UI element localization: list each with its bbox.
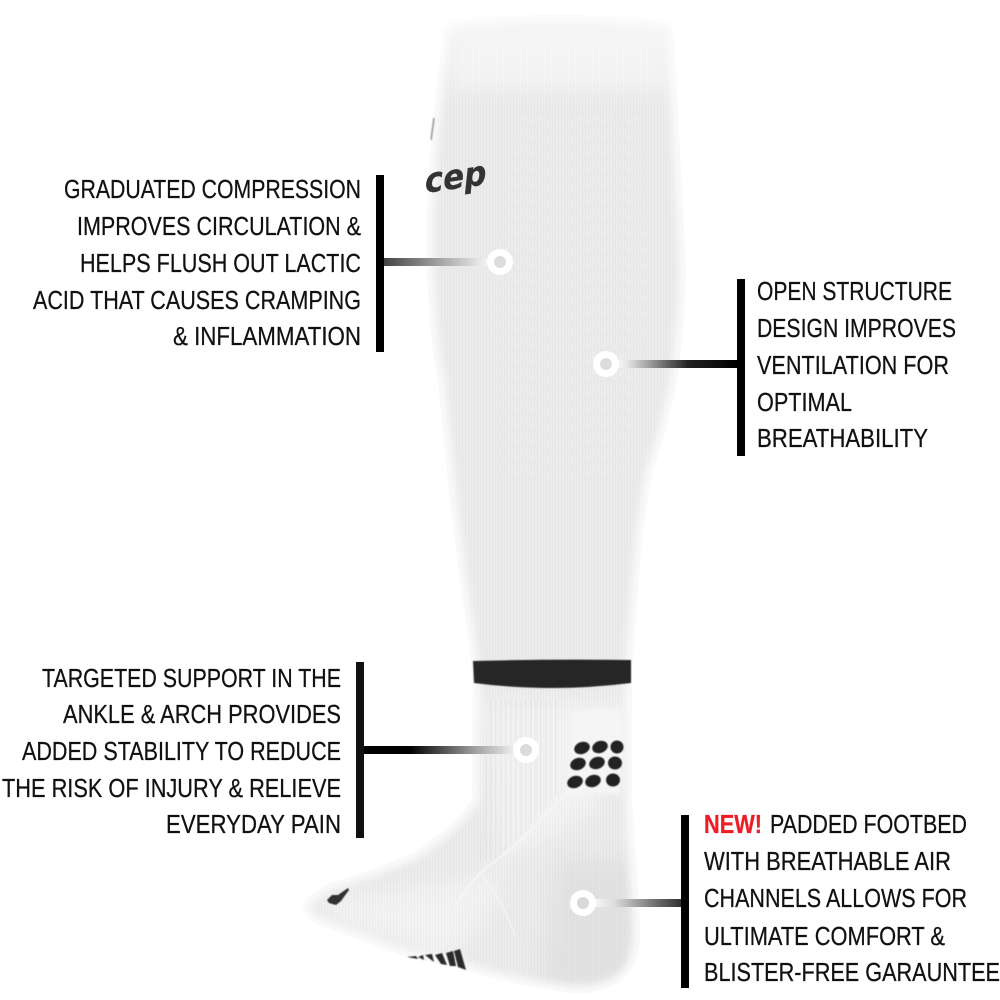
sole logo bbox=[407, 949, 466, 970]
heel shading bbox=[558, 874, 624, 976]
callout: graduated compression bbox=[33, 175, 510, 352]
connector bbox=[592, 899, 681, 907]
callout text: NEW! bbox=[704, 811, 762, 839]
heel seam bbox=[456, 844, 516, 902]
marker bbox=[596, 354, 616, 374]
arch panel bbox=[594, 711, 622, 794]
connector bbox=[384, 258, 492, 266]
callout text: EVERYDAY PAIN bbox=[166, 811, 341, 839]
connector bbox=[364, 746, 518, 754]
callout bar bbox=[356, 662, 364, 838]
callout text: ULTIMATE COMFORT & bbox=[704, 923, 945, 951]
marker bbox=[516, 740, 536, 760]
logo mark bbox=[431, 118, 434, 140]
calf band bbox=[473, 660, 631, 688]
callout text: TARGETED SUPPORT IN THE bbox=[42, 665, 341, 693]
callout text: THE RISK OF INJURY & RELIEVE bbox=[2, 775, 341, 803]
callout text bbox=[2, 665, 341, 839]
sock body bbox=[290, 0, 700, 1000]
callout: open structure bbox=[596, 278, 956, 456]
marker bbox=[574, 894, 592, 912]
callout text bbox=[757, 278, 956, 453]
brand logo: cep bbox=[423, 153, 489, 202]
callout text bbox=[704, 811, 1000, 987]
callout text: GRADUATED COMPRESSION bbox=[64, 176, 361, 204]
callout: targeted support bbox=[2, 662, 536, 839]
connector bbox=[614, 360, 737, 368]
ankle ribs bbox=[480, 700, 560, 860]
callout text bbox=[33, 176, 361, 351]
callout text: ACID THAT CAUSES CRAMPING bbox=[33, 287, 361, 315]
toe mark bbox=[327, 888, 349, 905]
callout text: WITH BREATHABLE AIR bbox=[704, 848, 951, 876]
callout text: ANKLE & ARCH PROVIDES bbox=[63, 701, 341, 729]
callout text: IMPROVES CIRCULATION & bbox=[77, 213, 361, 241]
heel dots bbox=[565, 739, 624, 790]
callout text: HELPS FLUSH OUT LACTIC bbox=[80, 250, 361, 278]
lighter calf and foot zones bbox=[320, 20, 670, 960]
callout text: ADDED STABILITY TO REDUCE bbox=[22, 738, 341, 766]
callout: padded footbed bbox=[574, 811, 1000, 988]
callout text: OPEN STRUCTURE bbox=[757, 278, 952, 306]
callout text: & INFLAMMATION bbox=[173, 323, 361, 351]
callout text: OPTIMAL bbox=[757, 389, 852, 417]
cuff fade bbox=[430, 15, 690, 110]
edge highlight bbox=[303, 15, 686, 993]
callout text: BREATHABILITY bbox=[757, 425, 928, 453]
callout text: VENTILATION FOR bbox=[757, 352, 949, 380]
callout text: DESIGN IMPROVES bbox=[757, 315, 956, 343]
callout text: PADDED FOOTBED bbox=[770, 811, 967, 839]
knit texture bbox=[290, 0, 700, 1000]
sock illustration bbox=[290, 0, 700, 1000]
marker bbox=[490, 252, 510, 272]
callout bar bbox=[737, 279, 745, 456]
callout bar bbox=[376, 175, 384, 352]
calf mesh bbox=[490, 110, 650, 480]
callout bar bbox=[681, 815, 689, 988]
